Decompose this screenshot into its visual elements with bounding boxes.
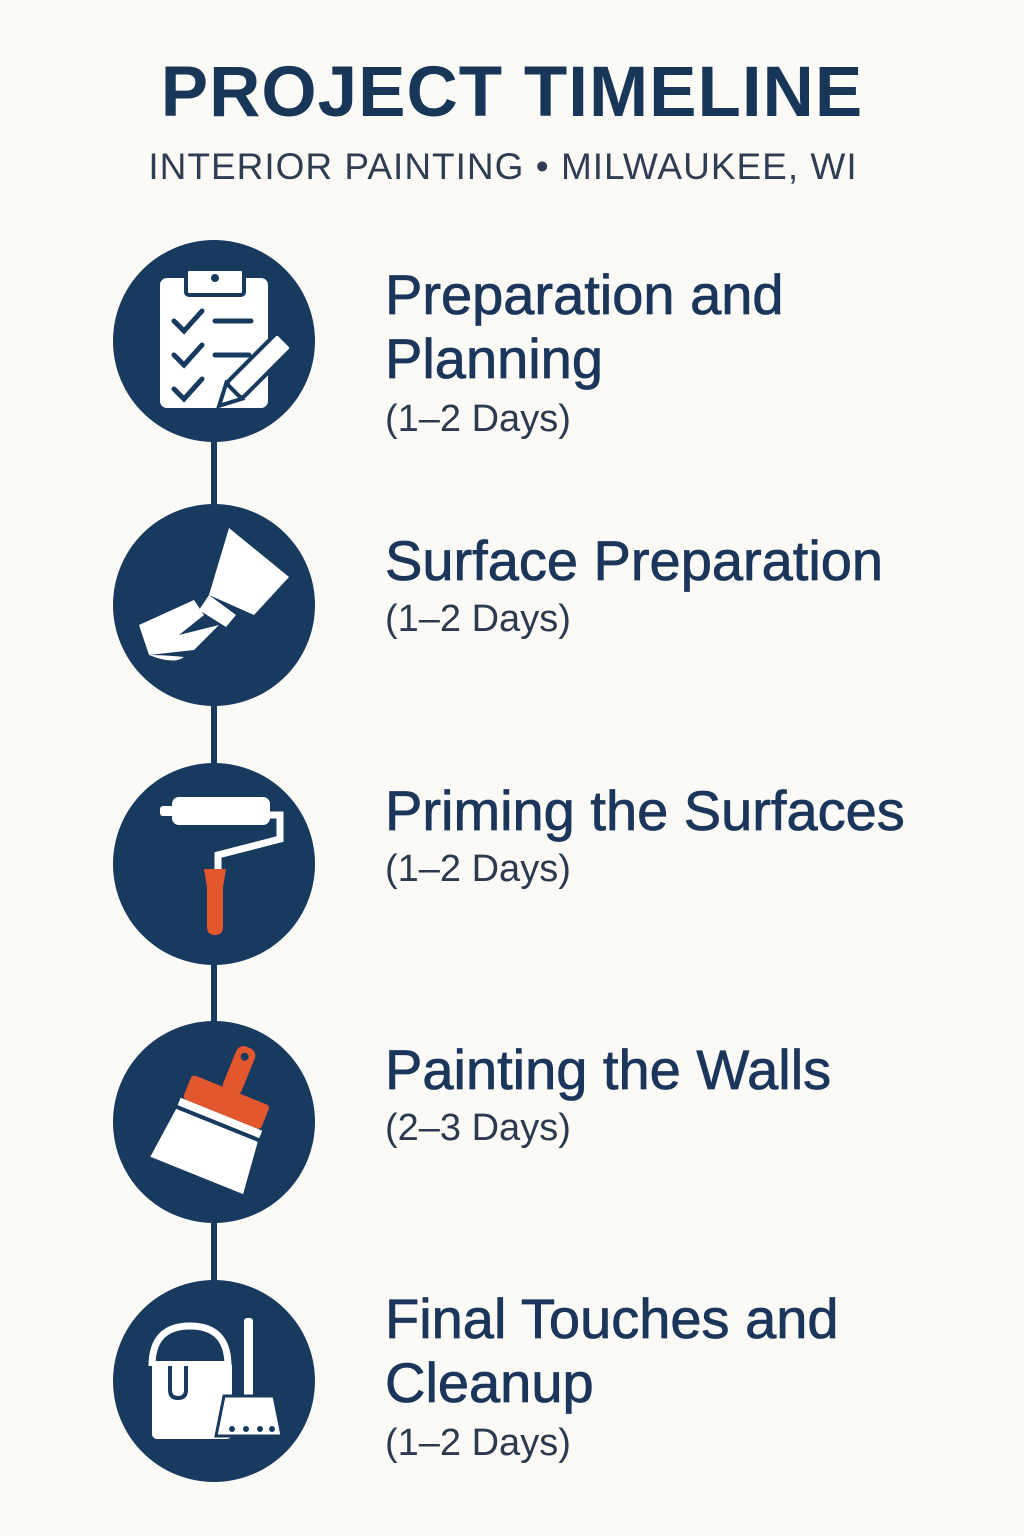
step 2 text: [385, 529, 883, 640]
step 1 text: Preparation and: [385, 263, 784, 326]
step 5 text: Final Touches and: [385, 1287, 838, 1350]
icon: bucket and broom: [113, 1280, 315, 1482]
subtitle: INTERIOR PAINTING • MILWAUKEE, WI: [148, 146, 858, 187]
step 3 text: (1–2 Days): [385, 848, 571, 890]
step 2 text: Surface Preparation: [385, 529, 883, 592]
step 1 text: (1–2 Days): [385, 398, 571, 440]
step 3 text: Priming the Surfaces: [385, 779, 905, 842]
icon: clipboard: [113, 240, 315, 442]
step 1 text: [385, 263, 784, 440]
icon: paintbrush: [113, 1021, 315, 1223]
step 4 text: (2–3 Days): [385, 1107, 571, 1149]
step 1 text: Planning: [385, 327, 603, 390]
step 5 text: (1–2 Days): [385, 1422, 571, 1464]
step 5 text: Cleanup: [385, 1351, 594, 1414]
step 5 text: [385, 1287, 838, 1464]
title: PROJECT TIMELINE: [161, 53, 863, 132]
icon: putty knife: [113, 504, 315, 706]
icon: paint roller: [113, 763, 315, 965]
step 3 text: [385, 779, 905, 890]
step 4 text: [385, 1038, 831, 1149]
step 4 text: Painting the Walls: [385, 1038, 831, 1101]
step 2 text: (1–2 Days): [385, 598, 571, 640]
